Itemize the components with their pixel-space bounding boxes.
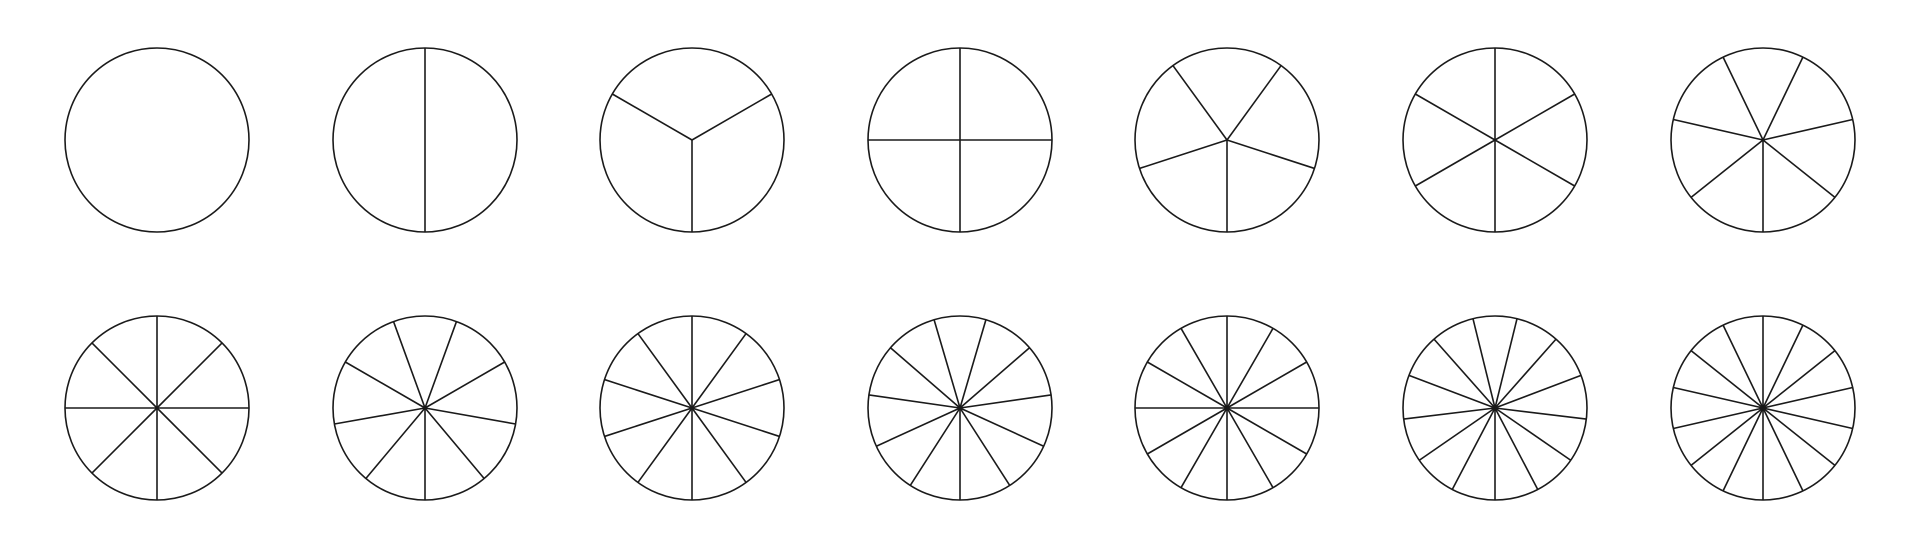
icon: circle 2 parts (333, 48, 517, 232)
icon: circle 13 parts (1403, 316, 1587, 500)
icon: circle 3 parts (600, 48, 784, 232)
icon: circle 12 parts (1135, 316, 1319, 500)
icon: circle 6 parts (1403, 48, 1587, 232)
icon: circle 4 parts (868, 48, 1052, 232)
icon: circle 8 parts (65, 316, 249, 500)
icon: circle 10 parts (600, 316, 784, 500)
icon: circle 1 part (65, 48, 249, 232)
icon: circle 9 parts (333, 316, 517, 500)
icon: circle 5 parts (1135, 48, 1319, 232)
icon: circle 11 parts (868, 316, 1052, 500)
icon: circle 14 parts (1671, 316, 1855, 500)
icon: circle 7 parts (1671, 48, 1855, 232)
